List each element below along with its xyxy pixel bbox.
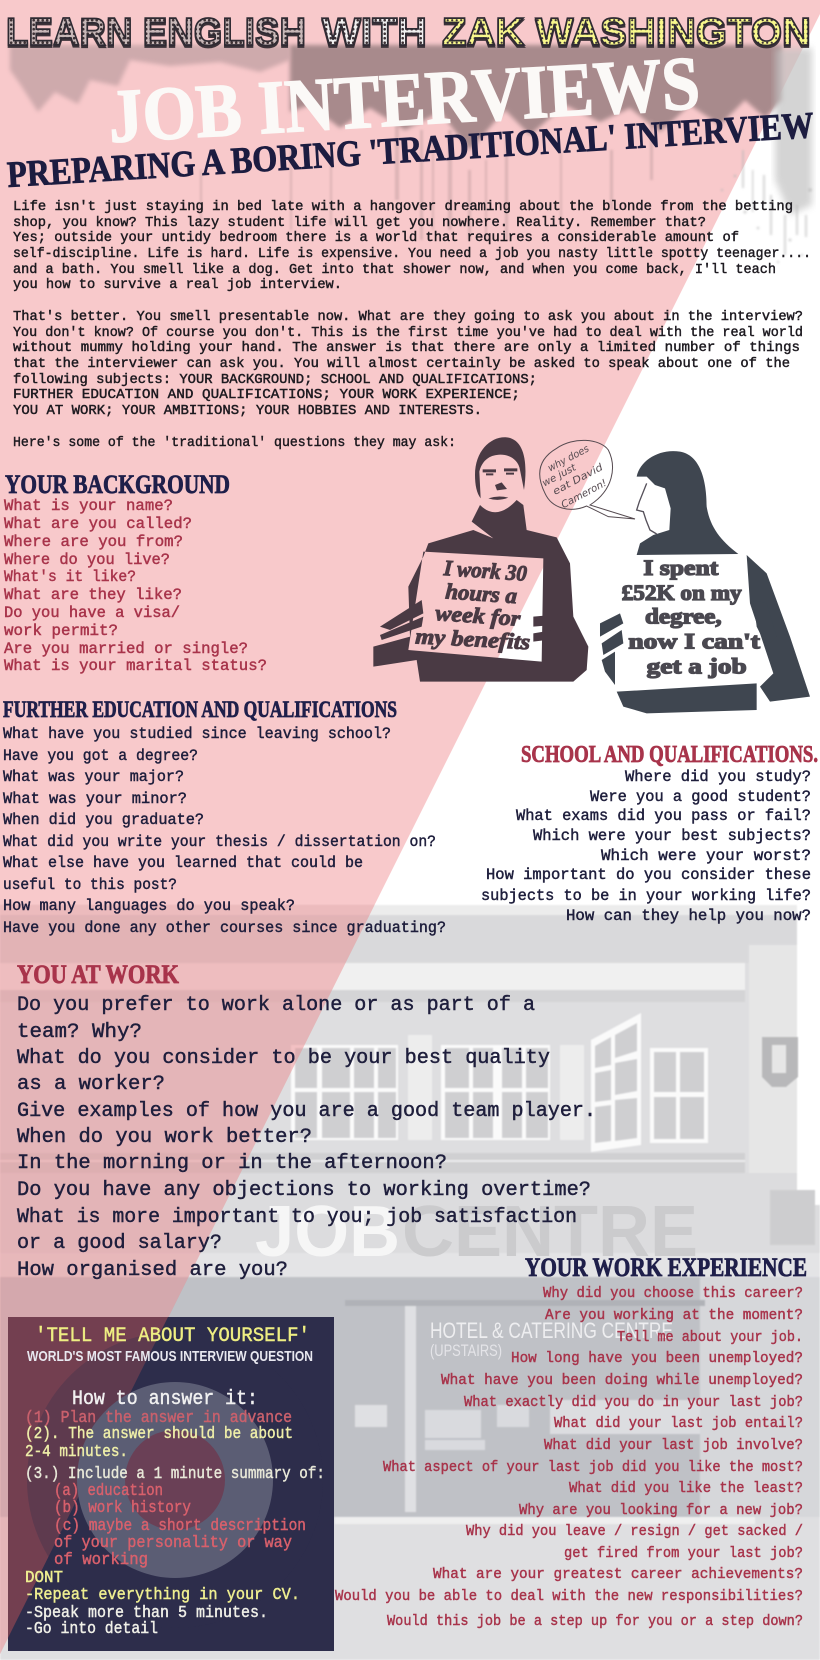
questions list: How organised are you? [17, 1259, 288, 1282]
questions list: What else have you learned that could be [3, 854, 363, 872]
answer tips: (1) Plan the answer in advance [25, 1409, 292, 1428]
section: school and qualifications [481, 742, 818, 925]
questions list: Are you working at the moment? [545, 1307, 803, 1324]
questions list: What are they like? [4, 586, 182, 604]
man's sign text: my benefits [415, 623, 531, 654]
answer tips: (b) work history [54, 1499, 191, 1518]
questions list: What have you been doing while unemployed? [441, 1372, 803, 1389]
questions list: Why are you looking for a new job? [519, 1502, 803, 1519]
header: learn english with zak washington: ZAK WASHINGTON [442, 11, 811, 54]
intro text: YOU AT WORK; YOUR AMBITIONS; YOUR HOBBIES AND INTERESTS. [13, 403, 482, 419]
target roundel [27, 1333, 273, 1578]
questions list: work permit? [4, 622, 118, 640]
heading: your background: YOUR BACKGROUND [5, 470, 230, 499]
questions list: get fired from your last job? [564, 1545, 803, 1562]
woman's sign text: get a job [647, 653, 747, 678]
questions list: subjects to be in your working life? [481, 887, 811, 905]
questions list: Why did you choose this career? [543, 1285, 803, 1302]
woman's sign text: degree, [645, 603, 722, 628]
questions list: What exams did you pass or fail? [516, 807, 811, 825]
background: job centre building photo: (UPSTAIRS) [430, 1341, 502, 1360]
questions list: Tell me about your job. [617, 1329, 803, 1346]
questions list: How can they help you now? [566, 907, 811, 925]
questions list: What did your last job entail? [554, 1415, 803, 1432]
questions list: Have you got a degree? [3, 747, 198, 765]
questions list: Were you a good student? [590, 788, 811, 806]
header: learn english with zak washington: WITH [322, 11, 427, 54]
panel subheading: WORLD'S MOST FAMOUS INTERVIEW QUESTION [27, 1348, 313, 1365]
intro text [13, 199, 811, 451]
panel: tell me about yourself [0, 1317, 334, 1660]
questions list: What did your last job involve? [544, 1437, 803, 1454]
questions list: What was your minor? [3, 790, 187, 808]
questions list: team? Why? [17, 1021, 142, 1044]
illustration: stencil of two people holding signs [373, 437, 810, 713]
pink tint over the photo area [0, 905, 374, 1660]
questions list [17, 994, 596, 1282]
man's sign text: hours a [445, 578, 518, 608]
questions list: When do you work better? [17, 1126, 312, 1149]
intro text: and a bath. You smell like a dog. Get into that shower now, and when you come back, I'll teach [13, 262, 776, 278]
questions list: Give examples of how you are a good team player. [17, 1100, 596, 1123]
questions list: What did you write your thesis / dissertation on? [3, 833, 436, 851]
speech bubble [540, 440, 635, 519]
intro text: FURTHER EDUCATION AND QUALIFICATIONS; YOUR WORK EXPERIENCE; [13, 387, 520, 403]
questions list: When did you graduate? [3, 811, 204, 829]
answer tips: (2). The answer should be about [25, 1425, 293, 1444]
questions list [3, 725, 446, 937]
intro text: shop, you know? This lazy student life will get you nowhere. Reality. Remember that? [13, 215, 706, 231]
questions list: Are you married or single? [4, 640, 248, 658]
intro text: You don't know? Of course you don't. This is the first time you've had to deal with the real world [13, 325, 803, 341]
section: your work experience [335, 1253, 807, 1630]
answer tips: (c) maybe a short description [54, 1517, 306, 1536]
questions list: Do you prefer to work alone or as part of a [17, 994, 535, 1017]
answer tips: (3.) Include a 1 minute summary of: [25, 1465, 325, 1484]
questions list: What was your major? [3, 768, 184, 786]
intro text: without mummy holding your hand. The answer is that there are only a limited number of things [13, 340, 800, 356]
questions list: Where do you live? [4, 551, 170, 569]
questions list: Which were your best subjects? [533, 827, 811, 845]
questions list: as a worker? [17, 1073, 165, 1096]
heading: you at work: YOU AT WORK [17, 960, 180, 989]
intro text: following subjects: YOUR BACKGROUND; SCHOOL AND QUALIFICATIONS; [13, 372, 537, 388]
answer tips: -Repeat everything in your CV. [25, 1586, 300, 1605]
title: job interviews: JOB INTERVIEWS [106, 41, 702, 159]
man's sign text [415, 555, 531, 654]
questions list: How important do you consider these [486, 866, 811, 884]
speech bubble: why does [546, 443, 591, 474]
woman's sign text: £52K on my [622, 580, 742, 605]
questions list: What is more important to you; job satisfaction [17, 1206, 577, 1229]
windows [291, 1013, 708, 1152]
questions list: What's it like? [4, 568, 136, 586]
questions list: What do you consider to be your best quality [17, 1047, 550, 1070]
grunge paint band behind the title [10, 45, 812, 263]
job centre sign lettering: JOB [255, 1192, 400, 1272]
intro text: that the interviewer can ask you. You will almost certainly be asked to speak about one of the [13, 356, 790, 372]
questions list: What did you like the least? [569, 1480, 803, 1497]
header: learn english with zak washington: LEARN ENGLISH [6, 11, 306, 54]
answer tips [25, 1388, 325, 1639]
intro text: you how to survive a real job interview. [13, 277, 342, 293]
answer tips: How to answer it: [72, 1388, 258, 1411]
questions list: Where did you study? [625, 768, 811, 786]
woman's sign text: I spent [643, 555, 719, 580]
intro text: Life isn't just staying in bed late with a hangover dreaming about the blonde from the betting [13, 199, 793, 215]
questions list [335, 1285, 803, 1630]
questions list: In the morning or in the afternoon? [17, 1152, 447, 1175]
header: learn english with zak washington [6, 11, 811, 54]
questions list: useful to this post? [3, 876, 177, 894]
woman's sign text [622, 555, 761, 678]
answer tips: -Go into detail [25, 1620, 158, 1639]
questions list: What have you studied since leaving school? [3, 725, 391, 743]
answer tips: DONT [25, 1569, 63, 1588]
intro text: Yes; outside your untidy bedroom there is a world that requires a considerable amount of [13, 230, 739, 246]
man's sign text: I work 30 [442, 555, 528, 586]
man figure [373, 437, 588, 682]
questions list: What is your marital status? [4, 657, 267, 675]
woman figure [600, 451, 810, 713]
questions list: How long have you been unemployed? [511, 1350, 803, 1367]
heading: further education: FURTHER EDUCATION AND QUALIFICATIONS [3, 697, 397, 722]
answer tips: of your personality or way [54, 1534, 292, 1553]
man's sign text: week for [435, 600, 522, 631]
questions list [4, 497, 267, 675]
woman's face outline [637, 483, 657, 534]
intro text: Here's some of the 'traditional' questions they may ask: [13, 435, 456, 451]
speech bubble: Cameron! [560, 478, 609, 511]
intro text: That's better. You smell presentable now. What are they going to ask you about in the interview? [13, 309, 803, 325]
answer tips: -Speak more than 5 minutes. [25, 1604, 268, 1623]
shop sign lettering: HOTEL & CATERING CENTRE [430, 1318, 673, 1343]
answer tips: 2-4 minutes. [25, 1443, 128, 1462]
questions list [481, 768, 811, 925]
questions list: Do you have a visa/ [4, 604, 180, 622]
panel heading: 'TELL ME ABOUT YOURSELF' [35, 1325, 310, 1348]
questions list: What is your name? [4, 497, 173, 515]
speech bubble: eat David [551, 462, 606, 498]
questions list: What are your greatest career achievements? [433, 1566, 803, 1583]
speech bubble: we just [541, 462, 579, 489]
questions list: How many languages do you speak? [3, 897, 295, 915]
answer tips: of working [54, 1551, 148, 1570]
questions list: or a good salary? [17, 1232, 222, 1255]
questions list: Where are you from? [4, 533, 183, 551]
section: you at work [17, 960, 596, 1282]
questions list: What are you called? [4, 515, 192, 533]
section: your background [4, 470, 267, 675]
section: further education and qualifications [3, 697, 446, 937]
woman's sign text: now I can't [628, 628, 761, 653]
questions list: Which were your worst? [601, 847, 811, 865]
background: job centre building photo: CENTRE [402, 1192, 698, 1272]
answer tips: (a) education [54, 1482, 163, 1501]
questions list: Have you done any other courses since graduating? [3, 919, 446, 937]
questions list: Do you have any objections to working overtime? [17, 1179, 591, 1202]
